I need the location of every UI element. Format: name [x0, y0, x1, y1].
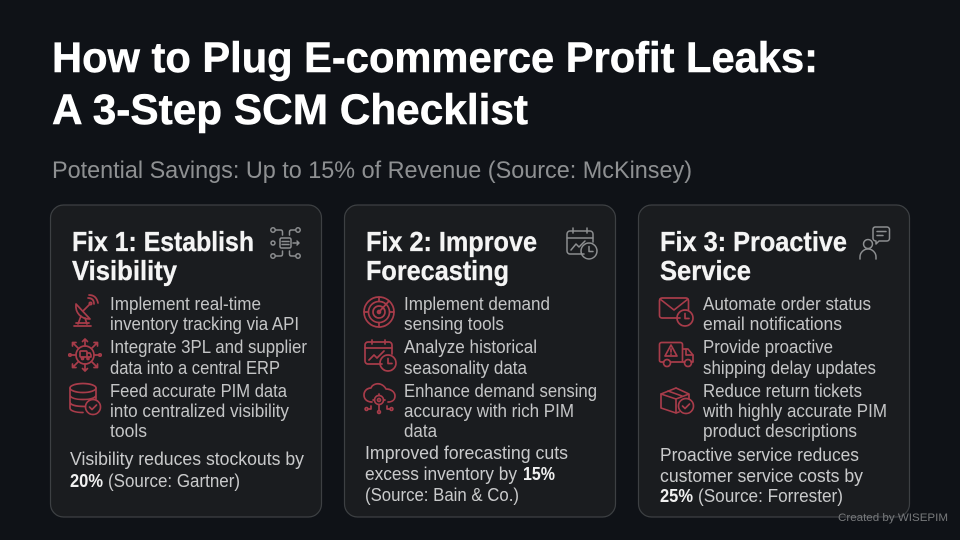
heading: Fix 3: Service	[660, 255, 751, 286]
text block: forecasting item 3: data	[404, 420, 438, 441]
text block: forecasting item 1	[404, 293, 550, 334]
heading: Fix 2	[366, 226, 537, 286]
stat: forecasting result: excess inventory by	[365, 463, 518, 484]
text block: forecasting item 1: Implement demand	[404, 293, 550, 314]
panel: Fix 3	[638, 205, 910, 517]
stat: visibility result: (Source: Gartner)	[108, 470, 240, 491]
icon: mail clock	[660, 298, 693, 326]
text block: service item 1	[703, 293, 871, 334]
icon: database check	[70, 384, 100, 414]
heading: Fix 1	[72, 226, 254, 286]
title: How to Plug E-commerce Profit Leaks:	[52, 34, 818, 82]
stat: visibility result: Visibility reduces stockouts by	[70, 448, 305, 469]
icon: seasonality calendar	[365, 340, 396, 371]
text block: forecasting item 2: seasonality data	[404, 357, 528, 378]
text block: service item 1: email notifications	[703, 313, 842, 334]
icon: package check	[661, 388, 694, 414]
text block: visibility item 3	[110, 380, 290, 441]
icon: person with speech bubble	[860, 227, 890, 259]
stat: service result: 25%	[660, 485, 693, 506]
icon: calendar clock	[567, 228, 597, 259]
text block: visibility item 1	[110, 293, 299, 334]
icon: satellite dish	[74, 295, 98, 326]
text block: forecasting item 3	[404, 380, 597, 441]
title: A 3-Step SCM Checklist	[52, 86, 528, 134]
text block: service item 2: Provide proactive	[703, 336, 833, 357]
text block: service item 3: with highly accurate PIM	[702, 400, 887, 421]
heading: Fix 2: Forecasting	[366, 255, 509, 286]
heading: Fix 2: Fix 2: Improve	[366, 226, 537, 257]
stat: service result: (Source: Forrester)	[698, 485, 843, 506]
icon: cloud gear	[364, 384, 395, 413]
text block: visibility item 1: inventory tracking via API	[110, 313, 299, 334]
stat: service result: Proactive service reduces	[660, 444, 859, 465]
heading: Fix 3: Fix 3: Proactive	[660, 226, 847, 257]
panel: Fix 1	[50, 205, 322, 517]
stat: visibility result	[70, 448, 305, 491]
icon: radar target	[364, 297, 394, 327]
stat: forecasting result: (Source: Bain & Co.)	[365, 484, 519, 505]
text block: visibility item 2: data into a central ERP	[110, 357, 280, 378]
heading: Fix 1: Fix 1: Establish	[72, 226, 254, 257]
icon: delay truck	[660, 342, 693, 366]
icon: hub with truck	[69, 339, 101, 371]
text block: visibility item 1: Implement real-time	[110, 293, 261, 314]
stat: forecasting result: Improved forecasting cuts	[365, 442, 568, 463]
stat: service result: customer service costs by	[660, 465, 864, 486]
text block: visibility item 3: into centralized visibility	[110, 400, 290, 421]
stat: service result	[660, 444, 864, 506]
heading: Fix 3	[660, 226, 847, 286]
text block: forecasting item 3: accuracy with rich PIM	[404, 400, 574, 421]
stat: forecasting result: 15%	[523, 463, 555, 484]
text block: visibility item 2	[110, 336, 307, 378]
subtitle: Potential Savings: Up to 15% of Revenue (Source: McKinsey)	[52, 157, 692, 184]
heading: Fix 1: Visibility	[72, 255, 177, 286]
stat: visibility result: 20%	[70, 470, 103, 491]
panel: Fix 2	[344, 205, 616, 517]
text block: service item 3: Reduce return tickets	[703, 380, 862, 401]
text block: service item 2: shipping delay updates	[703, 357, 876, 378]
text block: service item 3: product descriptions	[703, 420, 857, 441]
text block: service item 2	[703, 336, 876, 378]
text block: visibility item 2: Integrate 3PL and supplier	[110, 336, 307, 357]
watermark: Created by WISEPIM	[838, 512, 948, 524]
text block: forecasting item 2: Analyze historical	[404, 336, 537, 357]
text block: forecasting item 1: sensing tools	[404, 313, 504, 334]
text block: forecasting item 3: Enhance demand sensing	[404, 380, 597, 401]
text block: forecasting item 2	[404, 336, 537, 378]
icon: network hub	[271, 228, 300, 258]
stat: forecasting result	[365, 442, 568, 505]
text block: service item 3	[702, 380, 887, 441]
title	[52, 34, 818, 134]
text block: visibility item 3: tools	[110, 420, 147, 441]
text block: service item 1: Automate order status	[703, 293, 871, 314]
text block: visibility item 3: Feed accurate PIM data	[110, 380, 288, 401]
